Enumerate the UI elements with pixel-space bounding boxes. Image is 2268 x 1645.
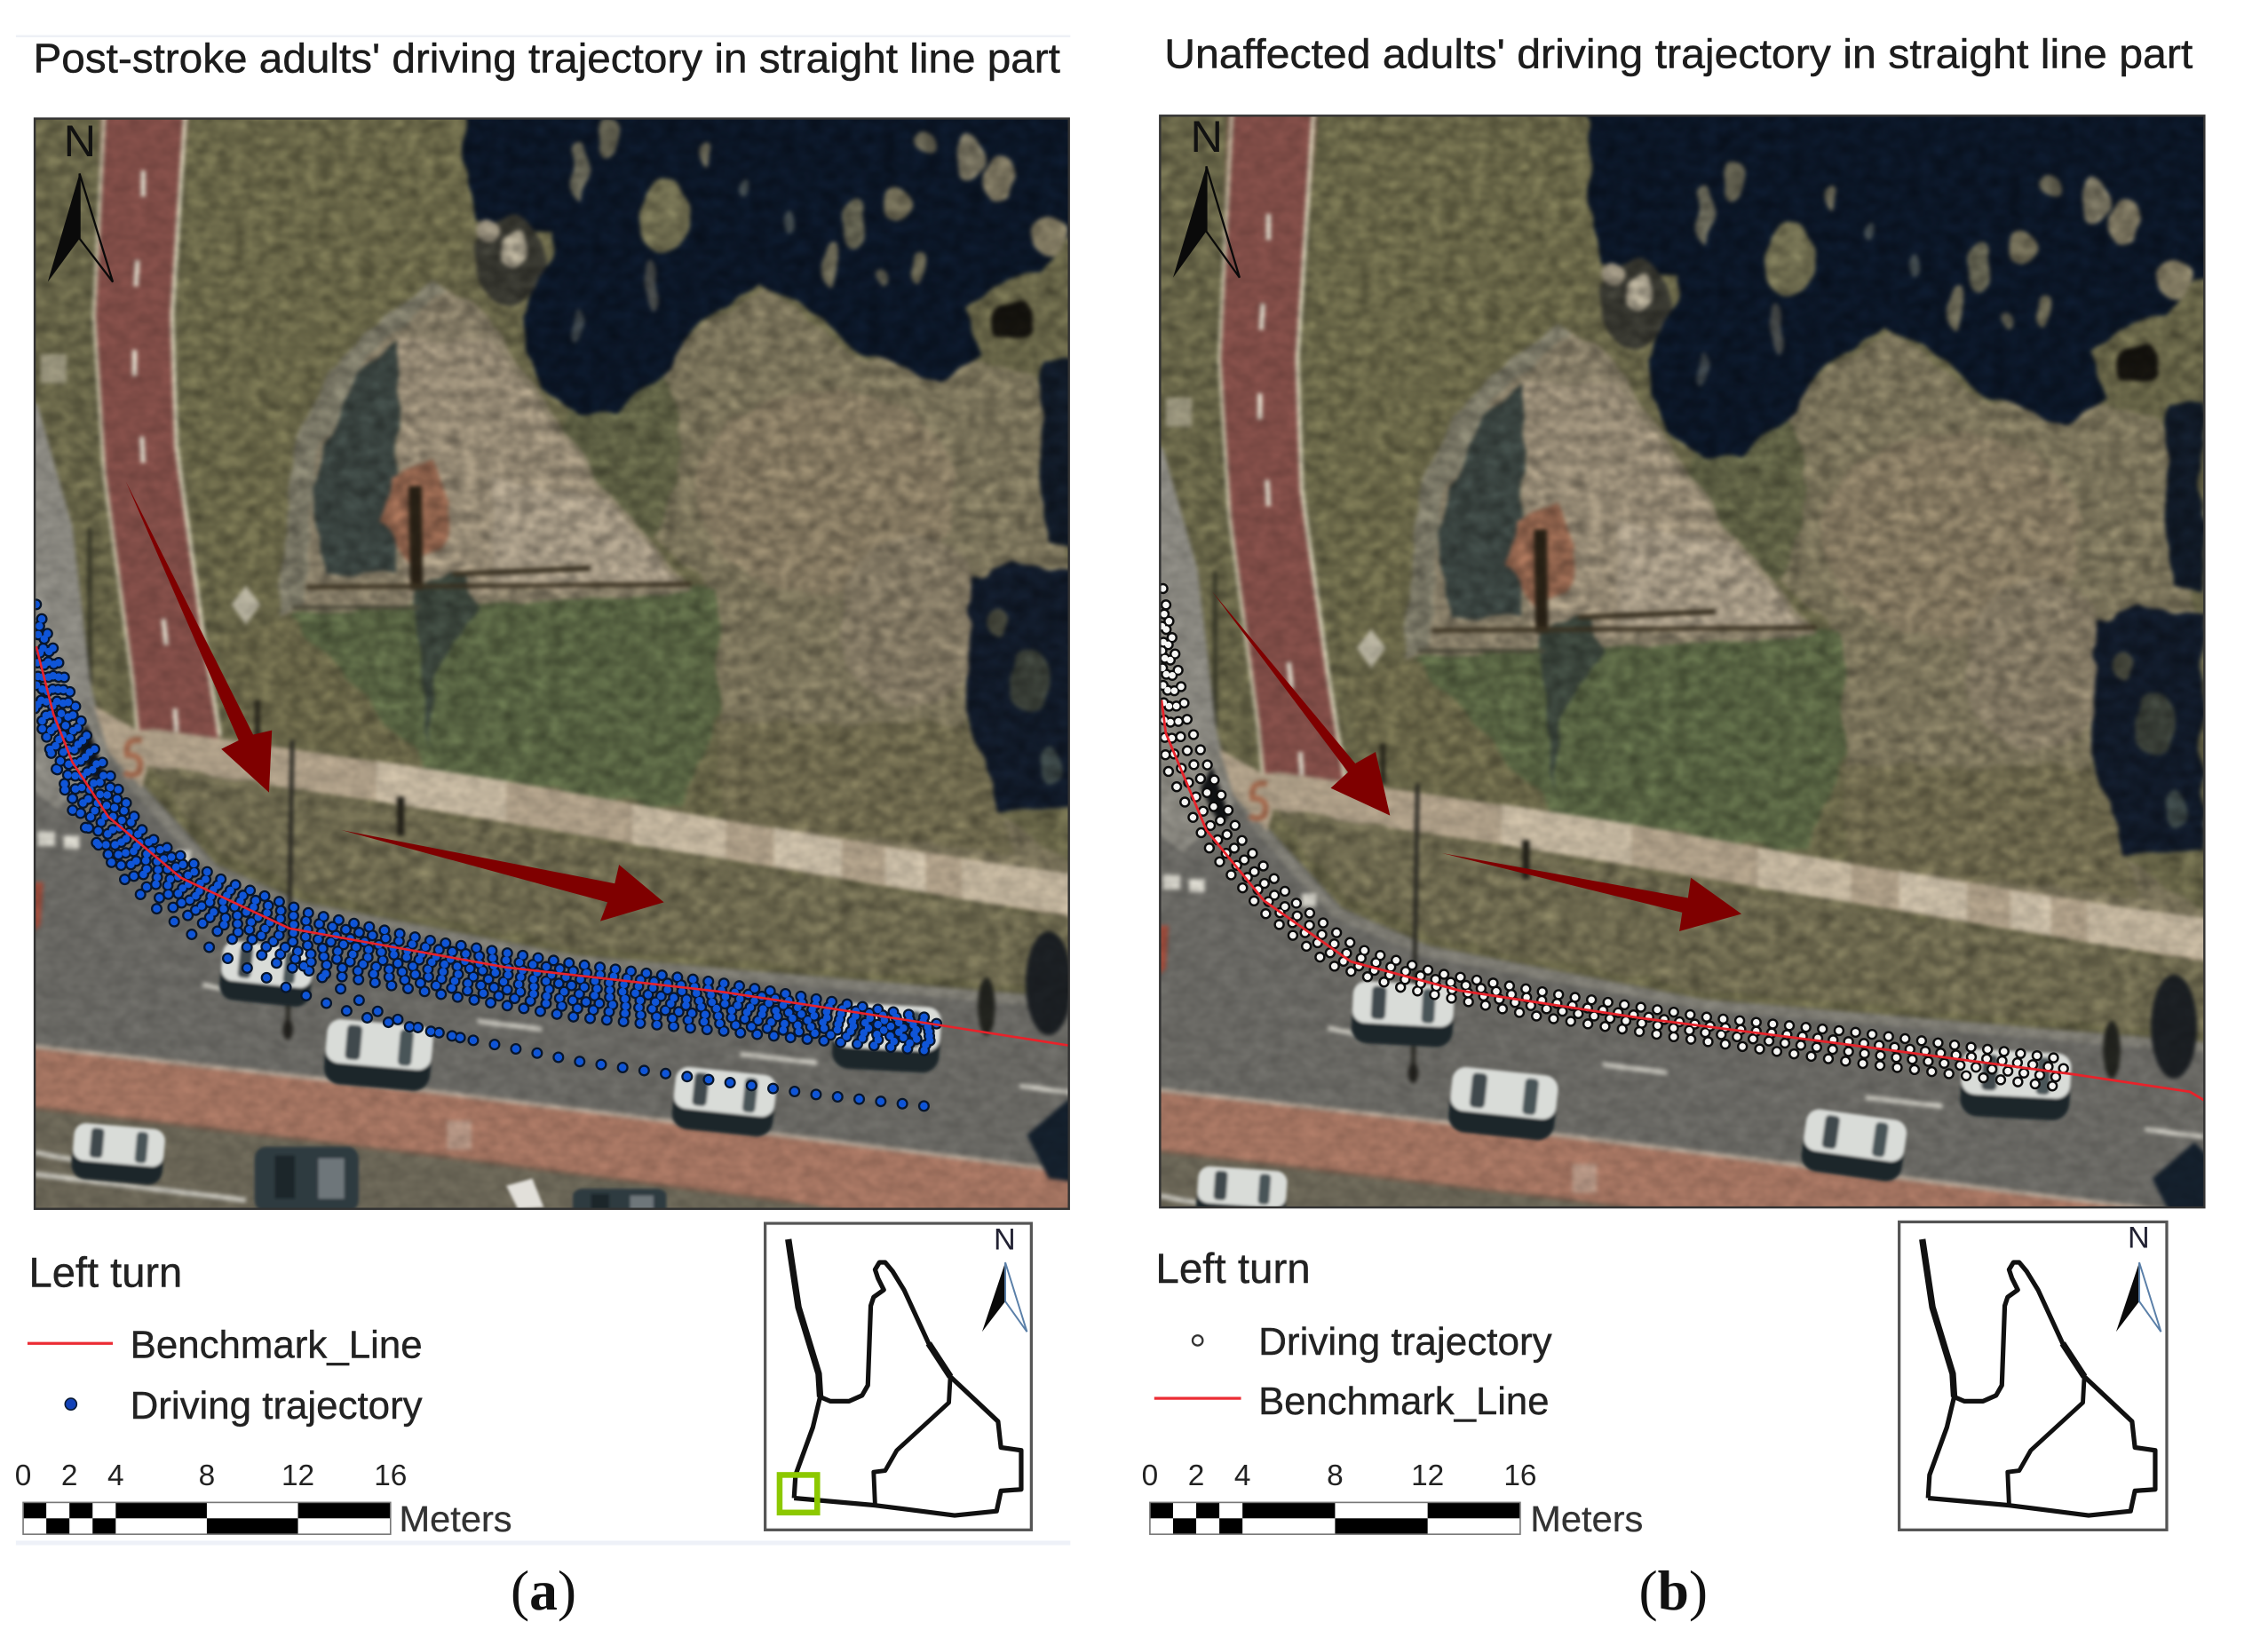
title: panel b: Unaffected adults' driving trajectory in straight line part xyxy=(1164,31,2193,77)
benchmark line xyxy=(36,646,1069,1046)
scale bar: panel b: 8 xyxy=(1327,1459,1344,1492)
caption b: (b) xyxy=(1638,1559,1708,1622)
legend: panel a: Benchmark_Line xyxy=(131,1324,423,1367)
scale bar: panel a: Meters xyxy=(400,1499,512,1539)
scale bar: panel b xyxy=(1142,1459,1643,1539)
scale bar: panel b: 12 xyxy=(1411,1459,1444,1492)
legend: panel a: Driving trajectory xyxy=(131,1384,423,1428)
cars xyxy=(70,940,942,1228)
scale bar: panel a: 16 xyxy=(374,1459,407,1492)
north arrow xyxy=(1173,111,1240,278)
panel a: post-stroke adults xyxy=(0,14,1157,1622)
north arrow: N xyxy=(64,115,96,166)
arrow: second direction xyxy=(341,830,664,921)
scale bar: panel b: 0 xyxy=(1142,1459,1158,1492)
scale bar: panel a xyxy=(15,1459,512,1539)
legend: panel b xyxy=(1154,1246,1552,1423)
caption a: (a) xyxy=(511,1559,576,1622)
inset route map: panel a xyxy=(765,1222,1031,1530)
scale bar: panel b: Meters xyxy=(1530,1499,1643,1539)
scale bar: panel a: 8 xyxy=(199,1459,215,1492)
benchmark line xyxy=(1162,700,2204,1101)
arrow: first direction xyxy=(1212,591,1390,816)
legend: panel a xyxy=(28,1250,423,1428)
arrow: first direction xyxy=(126,481,272,793)
inset route map: panel a: N xyxy=(994,1222,1016,1256)
inset route map: panel b: N xyxy=(2128,1222,2150,1255)
scale bar: panel a: 12 xyxy=(282,1459,314,1492)
legend: panel a: Left turn xyxy=(29,1250,182,1297)
scale bar: panel b: 2 xyxy=(1188,1459,1204,1492)
title: panel a: Post-stroke adults' driving trajectory in straight line part xyxy=(33,35,1060,81)
aerial map: panel a xyxy=(36,115,1067,1207)
legend: panel b: Benchmark_Line xyxy=(1258,1380,1549,1423)
trajectory dots: white xyxy=(1162,589,2070,1086)
scale bar: panel b: 16 xyxy=(1503,1459,1536,1492)
cars xyxy=(1195,980,2072,1226)
aerial map: panel b xyxy=(1162,111,2204,1206)
legend: panel b: Left turn xyxy=(1155,1246,1311,1293)
north arrow xyxy=(48,115,113,282)
north arrow: N xyxy=(1191,111,1223,162)
scale bar: panel b: 4 xyxy=(1234,1459,1250,1492)
scale bar: panel a: 2 xyxy=(61,1459,77,1492)
scale bar: panel a: 0 xyxy=(15,1459,31,1492)
arrow: second direction xyxy=(1442,853,1741,931)
panel b: unaffected adults xyxy=(1082,31,2268,1622)
trajectory dots: blue xyxy=(35,605,937,1106)
scale bar: panel a: 4 xyxy=(107,1459,124,1492)
legend: panel b: Driving trajectory xyxy=(1258,1320,1552,1364)
inset route map: panel b xyxy=(1899,1222,2167,1530)
